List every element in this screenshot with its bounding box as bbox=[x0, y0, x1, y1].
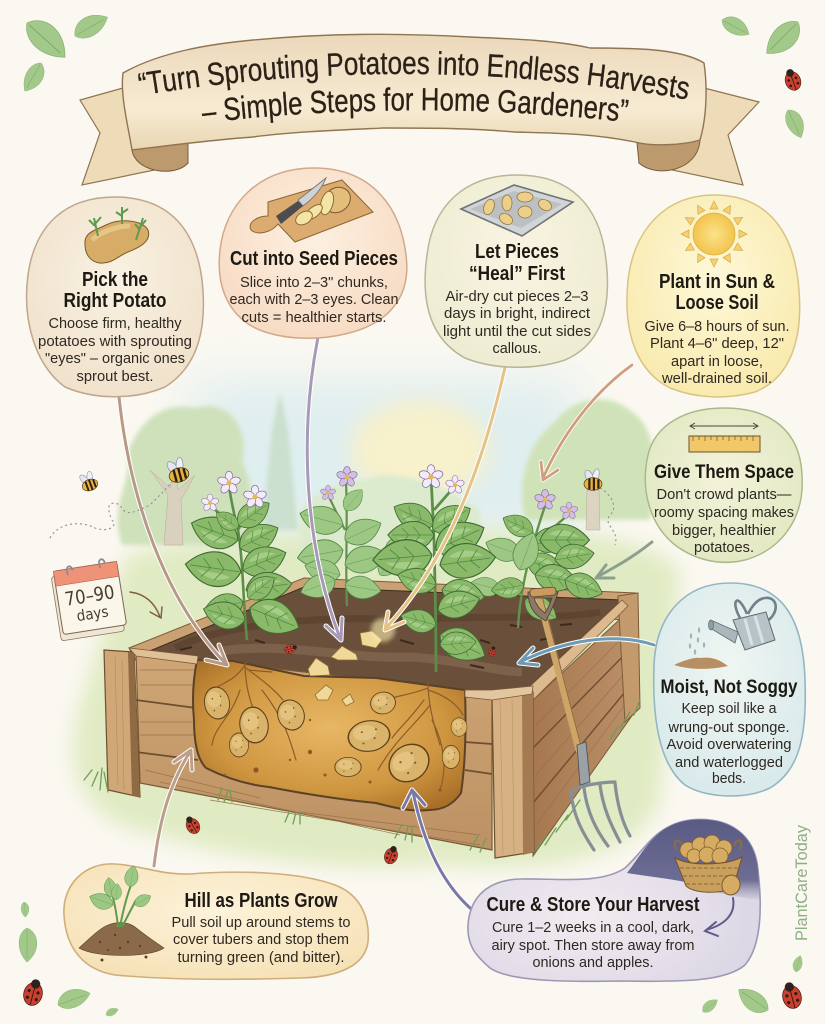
callout arrow: pick bbox=[119, 397, 227, 665]
icon arrow bbox=[705, 898, 733, 936]
body: Give 6–8 hours of sun. bbox=[644, 318, 790, 335]
body: callous. bbox=[492, 340, 542, 357]
body: Cure 1–2 weeks in a cool, dark, bbox=[492, 919, 694, 936]
callout arrow: space bbox=[596, 542, 652, 578]
icon: potato basket bbox=[675, 835, 742, 897]
icon: sprouting potato bbox=[85, 207, 149, 263]
body: Pull soil up around stems to bbox=[172, 914, 350, 931]
icon: watering can bbox=[674, 598, 776, 669]
right side wall bbox=[533, 608, 636, 856]
seed pieces bbox=[308, 631, 382, 706]
soil surface bbox=[140, 587, 622, 690]
heading: Pick the bbox=[82, 269, 148, 291]
body: cover tubers and stop them bbox=[173, 931, 349, 948]
body: airy spot. Then store away from bbox=[492, 937, 694, 954]
calendar: 70-90 days bbox=[50, 557, 128, 641]
banner folds bbox=[132, 140, 700, 171]
grass tufts bbox=[84, 700, 640, 852]
brand: PlantCareToday: PlantCareToday bbox=[792, 825, 811, 941]
body: Choose firm, healthy bbox=[48, 315, 182, 332]
body bbox=[644, 318, 790, 387]
cutaway soil bbox=[193, 660, 466, 811]
panel: cut into seed pieces bbox=[219, 168, 407, 338]
body: roomy spacing makes bbox=[654, 504, 794, 521]
heading: “Heal” First bbox=[469, 263, 565, 285]
plant 2 (back) bbox=[295, 466, 418, 606]
body: Avoid overwatering bbox=[666, 736, 792, 753]
panel: pick the right potato bbox=[27, 197, 203, 397]
callout arrow: cut bbox=[307, 337, 342, 640]
body: bigger, healthier bbox=[672, 522, 776, 539]
body: Slice into 2–3" chunks, bbox=[240, 274, 388, 291]
body: cuts = healthier starts. bbox=[242, 309, 386, 326]
back wall and rim bbox=[129, 578, 636, 668]
panel: hill as plants grow bbox=[64, 864, 368, 979]
body: each with 2–3 eyes. Clean bbox=[230, 291, 398, 308]
title line 1: “Turn Sprouting Potatoes into Endless Harvests bbox=[138, 51, 689, 100]
heading: Right Potato bbox=[64, 290, 166, 312]
calendar: 70-90 days: days bbox=[75, 602, 110, 625]
icon: sun bbox=[681, 201, 747, 267]
right front post bbox=[492, 692, 534, 858]
harvest potatoes bbox=[202, 685, 467, 789]
body: potatoes with sprouting bbox=[38, 333, 192, 350]
soil speckles bbox=[224, 699, 442, 792]
heading: Hill as Plants Grow bbox=[184, 890, 338, 912]
glow bbox=[371, 618, 395, 642]
title banner bbox=[79, 34, 760, 186]
body bbox=[230, 274, 398, 326]
panel: let pieces heal first bbox=[425, 175, 607, 367]
heading bbox=[64, 269, 166, 312]
plant 4 (back right) bbox=[469, 489, 607, 628]
body: beds. bbox=[712, 770, 746, 787]
panel: cure and store bbox=[468, 819, 760, 981]
garden scene backdrop bbox=[73, 380, 680, 868]
heading: Cure & Store Your Harvest bbox=[486, 894, 700, 916]
heading bbox=[469, 241, 565, 285]
heading: Moist, Not Soggy bbox=[660, 677, 798, 698]
body: potatoes. bbox=[694, 539, 754, 556]
plant 1 bbox=[183, 471, 305, 642]
heading: Give Them Space bbox=[654, 462, 794, 483]
banner right tail bbox=[639, 88, 759, 185]
callout arrow: heal bbox=[385, 367, 505, 630]
body: well-drained soil. bbox=[661, 370, 772, 387]
body: sprout best. bbox=[76, 368, 154, 385]
panel: plant in sun and loose soil bbox=[627, 195, 800, 397]
icon: cutting board and knife bbox=[250, 178, 373, 242]
panel: moist not soggy bbox=[654, 583, 805, 796]
arrow: calendar to bed bbox=[130, 592, 162, 618]
dark corner shade bbox=[627, 819, 760, 900]
body: days in bright, indirect bbox=[444, 305, 591, 322]
calendar: 70-90 days: 70–90 bbox=[63, 581, 116, 611]
body: Don't crowd plants— bbox=[656, 486, 792, 503]
front wall boards bbox=[136, 653, 492, 850]
roots bbox=[212, 662, 463, 790]
body bbox=[492, 919, 694, 971]
panel: give them space bbox=[645, 408, 802, 562]
title line 2: – Simple Steps for Home Gardeners” bbox=[202, 87, 629, 123]
body bbox=[443, 288, 591, 357]
small ladybugs on bed bbox=[283, 642, 497, 657]
icon: baking tray bbox=[461, 185, 573, 236]
body: apart in loose, bbox=[671, 353, 763, 370]
raised garden bed bbox=[84, 578, 640, 858]
garden fork bbox=[528, 587, 630, 850]
body: and waterlogged bbox=[675, 754, 783, 771]
plant 3 bbox=[371, 465, 498, 672]
body bbox=[38, 315, 192, 385]
heading: Cut into Seed Pieces bbox=[230, 248, 398, 270]
body: turning green (and bitter). bbox=[178, 949, 344, 966]
body: onions and apples. bbox=[532, 954, 654, 971]
banner left tail bbox=[80, 88, 188, 185]
callout arrow: cure bbox=[403, 790, 470, 908]
banner body bbox=[122, 34, 706, 150]
bees and flight paths bbox=[50, 455, 616, 545]
body bbox=[654, 486, 794, 556]
body: "eyes" – organic ones bbox=[45, 350, 185, 367]
body: Air-dry cut pieces 2–3 bbox=[446, 288, 588, 305]
body bbox=[172, 914, 350, 966]
body: light until the cut sides bbox=[443, 323, 591, 340]
left front post bbox=[104, 650, 140, 797]
potato plants bbox=[183, 465, 607, 672]
heading bbox=[659, 271, 775, 314]
body: wrung-out sponge. bbox=[668, 719, 790, 736]
heading: Plant in Sun & bbox=[659, 271, 775, 293]
body: Keep soil like a bbox=[682, 700, 777, 717]
back right post bbox=[618, 593, 640, 722]
callout arrow: moist bbox=[519, 639, 654, 665]
callout arrow: hill bbox=[154, 750, 192, 866]
heading: Let Pieces bbox=[475, 241, 559, 263]
icon: ruler with arrow bbox=[689, 423, 760, 452]
icon: soil mound with seedling bbox=[79, 865, 164, 962]
body bbox=[666, 700, 792, 787]
body: Plant 4–6" deep, 12" bbox=[650, 335, 784, 352]
heading: Loose Soil bbox=[676, 292, 758, 314]
callout arrow: sun bbox=[541, 365, 632, 480]
